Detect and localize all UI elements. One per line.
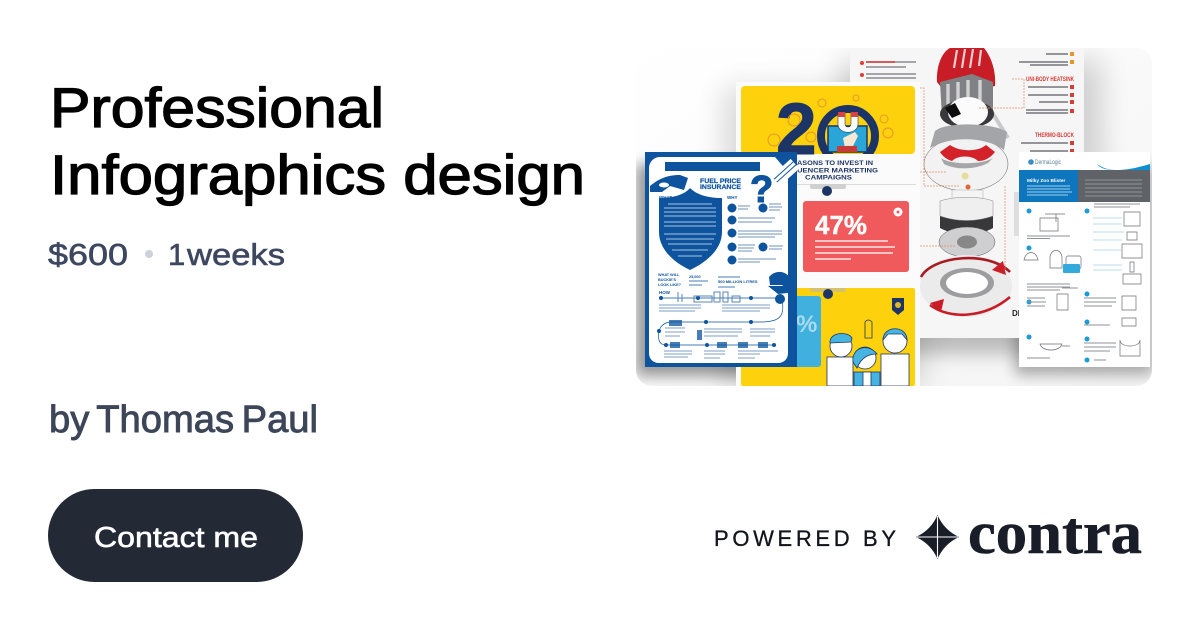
heading: INSURANCE — [700, 184, 741, 191]
contact button — [48, 489, 303, 582]
yellow header — [741, 86, 915, 154]
big bezel — [920, 255, 1012, 317]
soft shadows — [840, 60, 1102, 350]
hero collage — [636, 48, 1153, 388]
title: Professional — [50, 76, 384, 139]
what / why labels: WHY — [727, 195, 738, 200]
panel: milky zoo blister document — [1019, 152, 1150, 367]
powered by label: POWERED BY — [714, 526, 896, 551]
what will it look like row: LOOK LIKE? — [658, 283, 682, 287]
heading: CAMPAIGNS — [805, 174, 853, 182]
what will it look like row — [658, 272, 796, 294]
price and duration — [48, 237, 285, 272]
second yellow section — [741, 288, 915, 386]
icon: question mark: ? — [750, 169, 773, 211]
info panels: Milky Zoo Blister — [1027, 178, 1066, 184]
heading — [700, 178, 741, 190]
callout labels: UNI-BODY HEATSINK — [1026, 76, 1074, 83]
logo — [1028, 159, 1061, 166]
callout labels — [920, 52, 1074, 318]
stat card — [803, 201, 909, 272]
heading: UENCER MARKETING — [797, 168, 878, 174]
icon: fuel nozzle — [650, 175, 688, 192]
cap — [774, 158, 799, 182]
price and duration: $600 — [48, 237, 128, 272]
author name: by Thomas Paul — [49, 399, 318, 441]
icon: contra star — [916, 515, 959, 559]
what / why labels — [659, 195, 738, 295]
heading — [797, 160, 878, 180]
heading: FUEL PRICE — [700, 178, 741, 185]
cable — [993, 110, 1010, 139]
what will it look like row: WHAT WILL — [658, 273, 680, 277]
shield — [659, 188, 722, 270]
white can shape — [649, 157, 788, 363]
step drawings — [1024, 212, 1142, 356]
yellow header: 2 — [776, 89, 817, 170]
title — [50, 76, 585, 206]
illustrated people — [827, 320, 909, 386]
what will it look like row: 500 MILLION LITRES — [718, 279, 758, 284]
title: Infographics design — [50, 143, 585, 206]
what / why labels: WHAT — [659, 195, 672, 200]
trim ring — [924, 144, 1008, 190]
how timeline — [657, 292, 785, 358]
lamp collar and dark body — [952, 190, 984, 198]
panel: exploded downlight document — [850, 48, 1084, 338]
why icons and text — [728, 204, 783, 264]
price and duration: 1 — [168, 237, 185, 272]
callout labels: THERMO-BLOCK — [1035, 132, 1074, 139]
what will it look like row: BUCKIE'S — [658, 278, 676, 282]
what will it look like row: 25,000 — [689, 275, 701, 279]
callout labels: DI — [1012, 309, 1020, 318]
contact button: Contact me — [94, 522, 258, 554]
second yellow section: % — [796, 311, 817, 338]
panel: influencer marketing document — [736, 82, 920, 386]
info panels — [1019, 164, 1150, 202]
dark ring and white ball — [940, 102, 994, 126]
logo: DermaLogic — [1035, 160, 1061, 166]
grey heatsink — [940, 74, 993, 118]
panel: fuel price insurance document — [645, 152, 799, 367]
heading: ASONS TO INVEST IN — [797, 160, 873, 167]
price and duration: weeks — [186, 237, 285, 272]
what / why labels: HOW — [659, 290, 671, 295]
step captions — [1027, 204, 1140, 360]
left red notes — [860, 61, 916, 78]
contra logo: contra — [968, 500, 1142, 566]
exploded lamp — [920, 48, 1012, 317]
stat card: 47% — [815, 210, 867, 240]
red cage — [936, 48, 996, 86]
step markers — [1026, 208, 1090, 362]
